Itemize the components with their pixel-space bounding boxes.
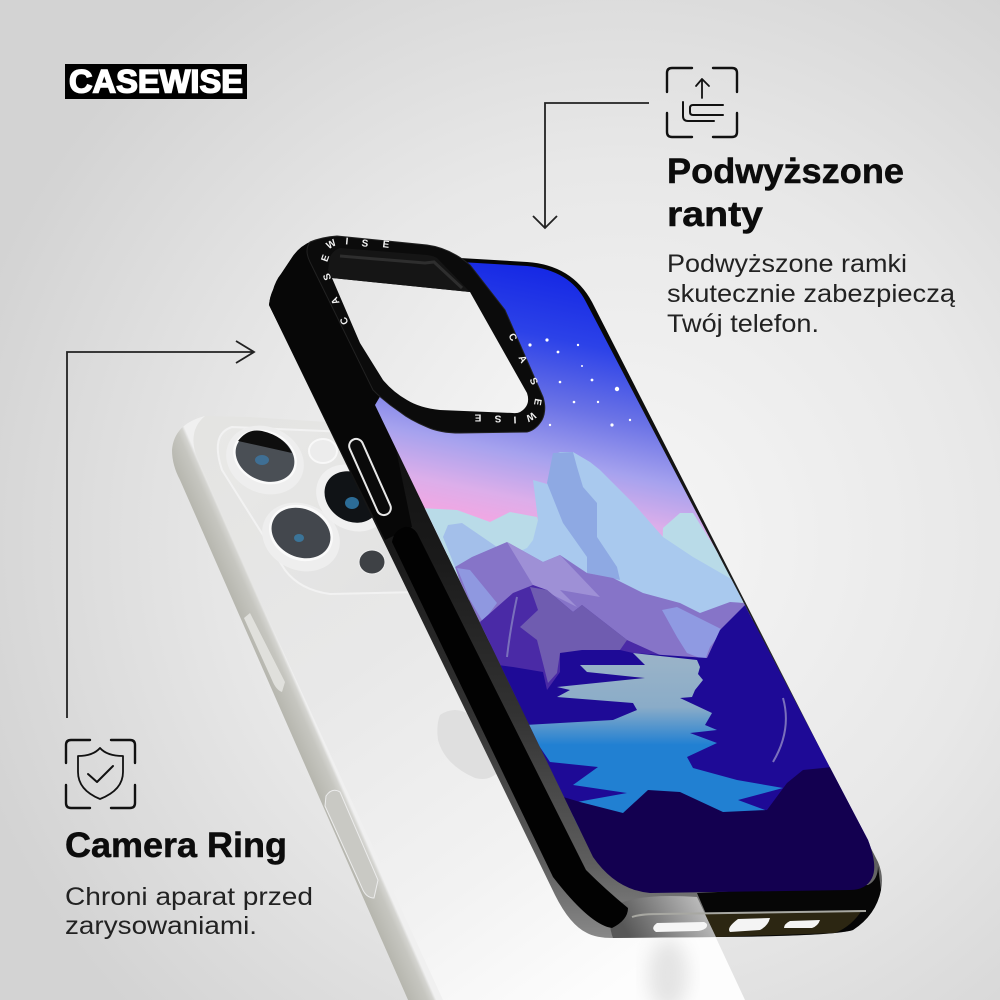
ring text: I: [513, 413, 517, 425]
text: camera ring description: zarysowaniami.: [65, 912, 257, 940]
upper left black shoulder: [269, 241, 412, 540]
text: raised edges description: Podwyższone ramki: [667, 250, 907, 278]
flash: [309, 439, 337, 463]
heading: raised edges: [667, 152, 904, 234]
apple logo: [437, 710, 500, 779]
ring text: S: [527, 376, 540, 387]
window: [332, 278, 528, 413]
inner wall highlight: [340, 256, 462, 288]
ring text: I: [345, 236, 349, 248]
bottom highlight: [632, 911, 866, 917]
arrow: raised edges: [533, 103, 649, 228]
text: raised edges description: [667, 250, 955, 338]
case shell: [269, 236, 882, 938]
side button pill: [347, 437, 393, 517]
ring text: W: [325, 237, 339, 252]
bottom edge left grey: [610, 896, 716, 938]
camera ring: [307, 236, 545, 433]
mid range left blue: [457, 568, 497, 622]
phone lower shading: [648, 939, 688, 1000]
sky: [375, 262, 719, 555]
phone side band: [172, 416, 443, 1000]
camera bump: [218, 427, 420, 594]
lens bottom: [251, 490, 351, 584]
ring text: W: [523, 409, 537, 424]
side button upper: [244, 613, 285, 692]
mid range: [455, 542, 745, 665]
white phone behind the case: [172, 413, 745, 1000]
heading: camera ring: Camera Ring: [65, 826, 287, 865]
side button lower: [325, 790, 378, 898]
right black section: [697, 866, 881, 937]
left blue peak: [443, 523, 497, 567]
phone case: [269, 236, 882, 938]
mid range lit slope: [507, 542, 600, 607]
port: usb: [729, 918, 770, 932]
icon: raised edges: [667, 68, 737, 137]
ring text: E: [382, 239, 390, 251]
text: camera ring description: [65, 883, 313, 940]
icon: shield: [66, 740, 135, 808]
heading: raised edges: Podwyższone: [667, 152, 904, 191]
pale back range: [420, 508, 760, 620]
foreground: [564, 767, 874, 893]
arrow: camera ring: [67, 341, 254, 718]
brand logo: CASEWISE: [69, 64, 243, 100]
side slot: [392, 527, 628, 928]
main peak: [522, 452, 743, 613]
artwork: mountains: [375, 262, 874, 893]
ring text: E: [531, 398, 543, 406]
text: camera ring description: Chroni aparat przed: [65, 883, 313, 911]
lens right: [303, 451, 401, 545]
ring text: S: [361, 238, 369, 250]
indigo land: [498, 605, 900, 850]
ring text: S: [494, 412, 501, 424]
ring text: E: [320, 253, 332, 263]
ring text: A: [516, 354, 529, 365]
stars: [528, 338, 631, 427]
port: mic: [784, 920, 820, 928]
dark mountain lit: [520, 587, 627, 683]
inner top wall: [328, 248, 470, 292]
heading: raised edges: ranty: [667, 195, 764, 234]
ring text: C: [506, 332, 519, 343]
ring text: A: [329, 295, 342, 306]
sensor: [359, 550, 385, 574]
ring text: C: [338, 315, 351, 326]
port: speaker: [653, 922, 707, 932]
text: raised edges description: skutecznie zabezpieczą: [667, 280, 955, 308]
bottom edge olive: [705, 910, 862, 937]
lake: [525, 653, 783, 830]
peak shaded face: [547, 452, 620, 580]
dark mountain: [480, 585, 660, 700]
text: raised edges description: Twój telefon.: [667, 310, 819, 338]
ring outer: [307, 236, 545, 433]
mid range right blue: [662, 607, 723, 660]
ridge streaks: [507, 597, 786, 762]
lens top: [215, 413, 315, 507]
ring text: E: [474, 412, 481, 422]
ring text: [320, 236, 543, 425]
ring text: S: [322, 271, 334, 282]
